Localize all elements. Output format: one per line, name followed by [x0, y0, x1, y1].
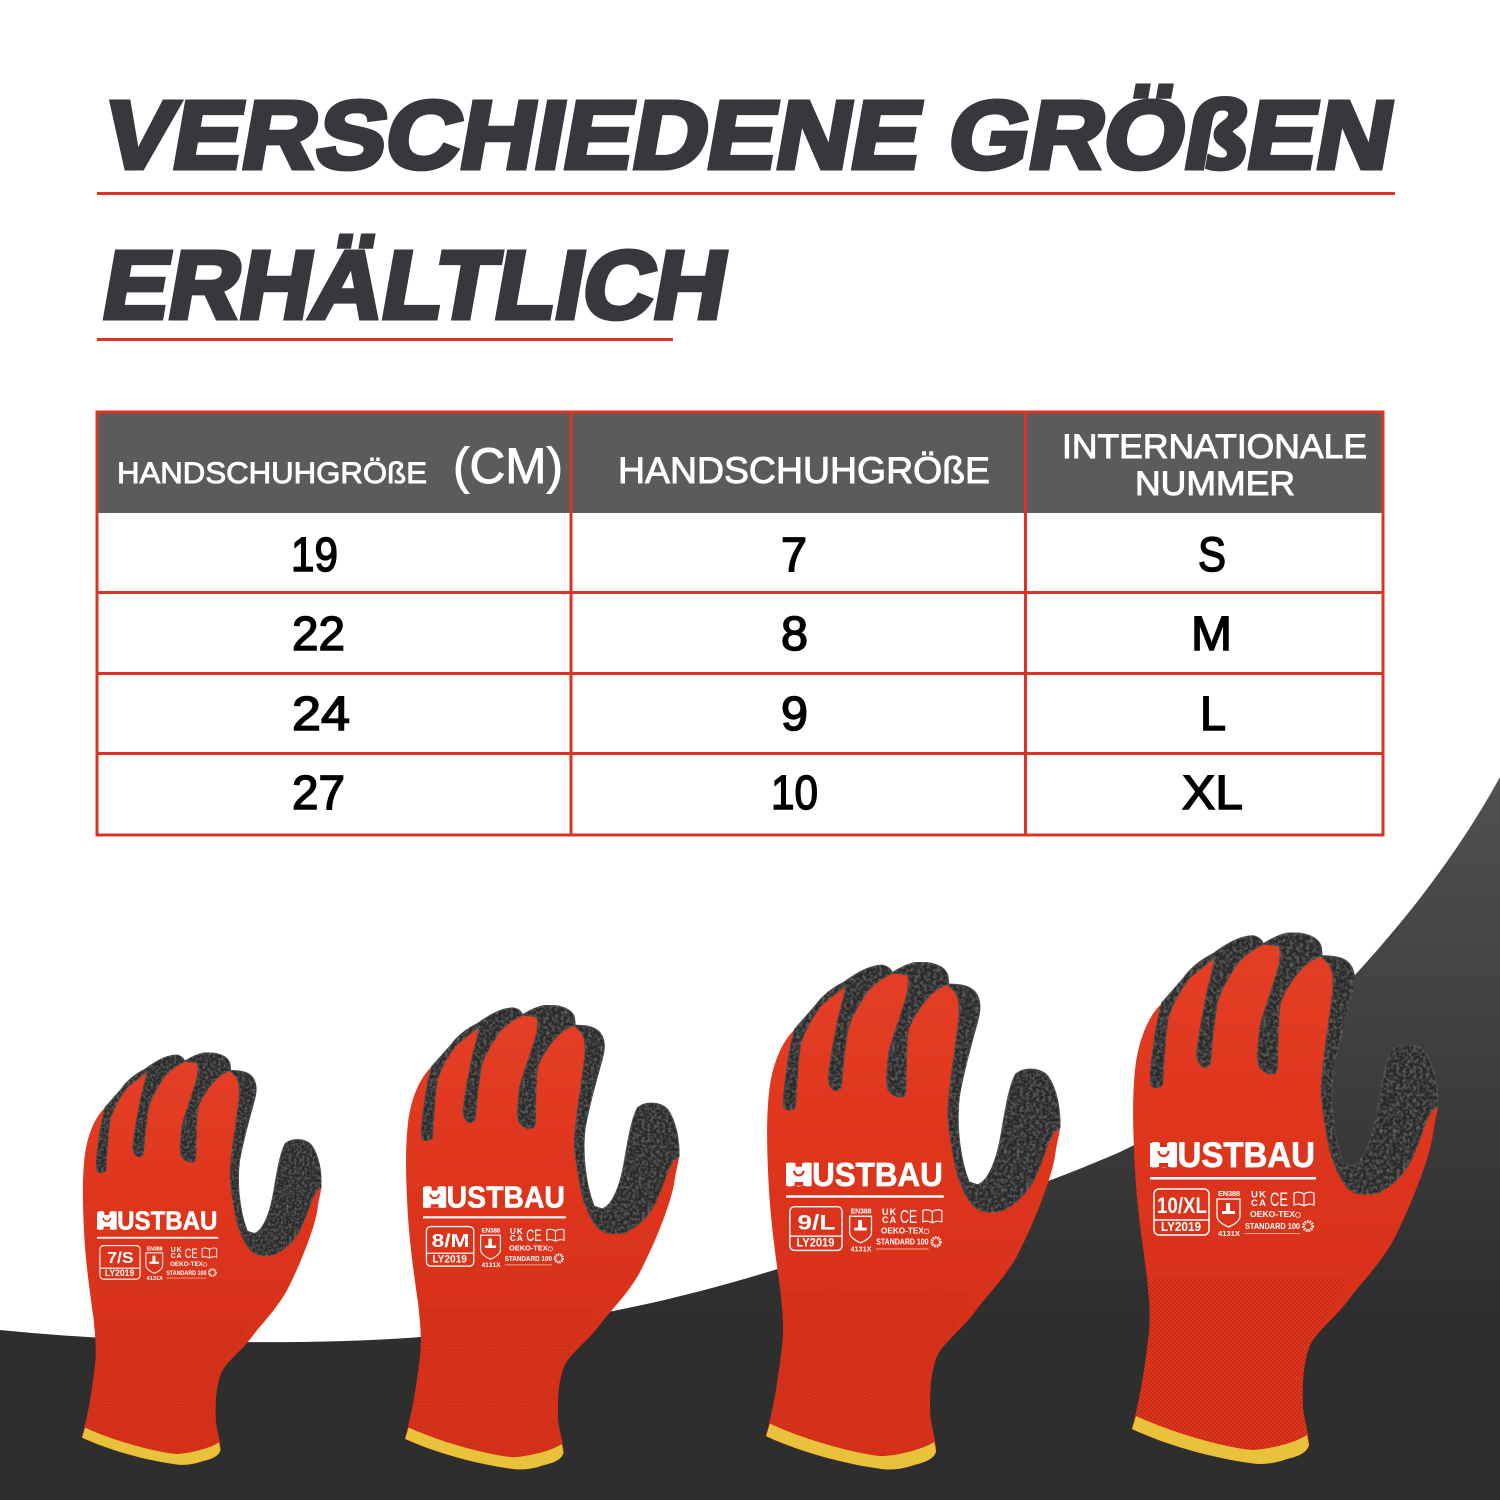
- glove label M: STANDARD 100: [505, 1254, 552, 1263]
- glove label M: OEKO-TEX: [509, 1244, 548, 1253]
- row 19 7 S: 7: [781, 529, 807, 582]
- row 19 7 S: S: [1198, 529, 1226, 582]
- row 22 8 M: [292, 608, 1232, 661]
- glove size XL: [1120, 933, 1440, 1464]
- glove label M: MUSTBAU: [423, 1182, 565, 1215]
- glove label L: STANDARD 100: [876, 1238, 929, 1247]
- glove label S: 4131X: [147, 1276, 163, 1282]
- glove label S: LY2019: [105, 1268, 134, 1279]
- row 22 8 M: 8: [781, 608, 808, 661]
- glove label L: 4131X: [851, 1245, 872, 1253]
- glove label XL: CE: [1270, 1190, 1288, 1211]
- glove label S: STANDARD 100: [166, 1270, 207, 1277]
- glove size M: [394, 1005, 681, 1469]
- size table: [97, 412, 1383, 835]
- glove label S: UK: [171, 1247, 182, 1254]
- glove label L: CA: [882, 1215, 897, 1225]
- row 22 8 M: 22: [292, 608, 345, 661]
- header: glove size in cm: [117, 438, 563, 494]
- row 19 7 S: 19: [291, 529, 338, 582]
- title line 2: ERHÄLTLICH: [95, 231, 736, 339]
- table header background: [97, 412, 1383, 513]
- header: glove size in cm: (CM): [453, 438, 563, 494]
- row 27 10 XL: [292, 767, 1243, 820]
- title: [95, 81, 1402, 341]
- dark curved background: [0, 777, 1500, 1500]
- glove label L: [786, 1157, 944, 1253]
- glove label M: EN388: [481, 1228, 501, 1235]
- title line 1: VERSCHIEDENE GRÖßEN: [96, 81, 1402, 189]
- row 24 9 L: L: [1200, 688, 1226, 741]
- glove label XL: CA: [1251, 1198, 1266, 1209]
- glove label L: CE: [900, 1207, 917, 1227]
- glove label M: 8/M: [432, 1231, 469, 1252]
- glove label M: [423, 1182, 566, 1269]
- row 27 10 XL: 27: [292, 767, 345, 820]
- glove size L: [754, 962, 1062, 1469]
- header: glove size in cm: HANDSCHUHGRÖßE: [117, 457, 427, 490]
- glove label S: [97, 1208, 218, 1282]
- glove label M: CE: [526, 1227, 542, 1245]
- row 19 7 S: [291, 529, 1226, 582]
- glove label XL: STANDARD 100: [1245, 1221, 1300, 1231]
- glove label S: 7/S: [107, 1249, 134, 1267]
- glove label L: 9/L: [797, 1211, 836, 1234]
- glove label L: UK: [882, 1207, 897, 1217]
- glove size S: [73, 1053, 323, 1465]
- glove label L: EN388: [851, 1207, 872, 1215]
- row 24 9 L: 9: [781, 688, 808, 741]
- glove label XL: MUSTBAU: [1150, 1136, 1315, 1175]
- glove label M: 4131X: [481, 1262, 501, 1269]
- glove label XL: OEKO-TEX: [1250, 1209, 1295, 1219]
- row 27 10 XL: 10: [771, 767, 818, 820]
- glove label M: LY2019: [432, 1254, 467, 1266]
- glove label S: CE: [185, 1245, 198, 1261]
- row 24 9 L: 24: [292, 688, 350, 741]
- glove label S: MUSTBAU: [97, 1208, 217, 1236]
- glove label M: CA: [510, 1234, 523, 1243]
- row 27 10 XL: XL: [1182, 767, 1243, 820]
- glove label M: UK: [510, 1227, 523, 1236]
- row 22 8 M: M: [1191, 608, 1232, 661]
- glove label XL: [1150, 1136, 1316, 1238]
- glove label S: OEKO-TEX: [170, 1261, 204, 1268]
- glove label XL: LY2019: [1161, 1219, 1201, 1234]
- glove label XL: 4131X: [1218, 1229, 1240, 1238]
- header: glove size: HANDSCHUHGRÖßE: [618, 450, 990, 491]
- header: international number: NUMMER: [1135, 465, 1295, 503]
- glove label XL: EN388: [1218, 1189, 1240, 1198]
- glove label L: LY2019: [796, 1236, 835, 1250]
- glove label L: OEKO-TEX: [881, 1226, 924, 1235]
- header: international number: [1062, 428, 1367, 503]
- glove label XL: 10/XL: [1157, 1193, 1207, 1218]
- glove label L: MUSTBAU: [786, 1157, 943, 1194]
- header: international number: INTERNATIONALE: [1062, 428, 1367, 466]
- row 24 9 L: [292, 688, 1226, 741]
- glove label XL: UK: [1251, 1190, 1266, 1200]
- glove label S: CA: [171, 1253, 182, 1260]
- glove label S: EN388: [147, 1247, 163, 1253]
